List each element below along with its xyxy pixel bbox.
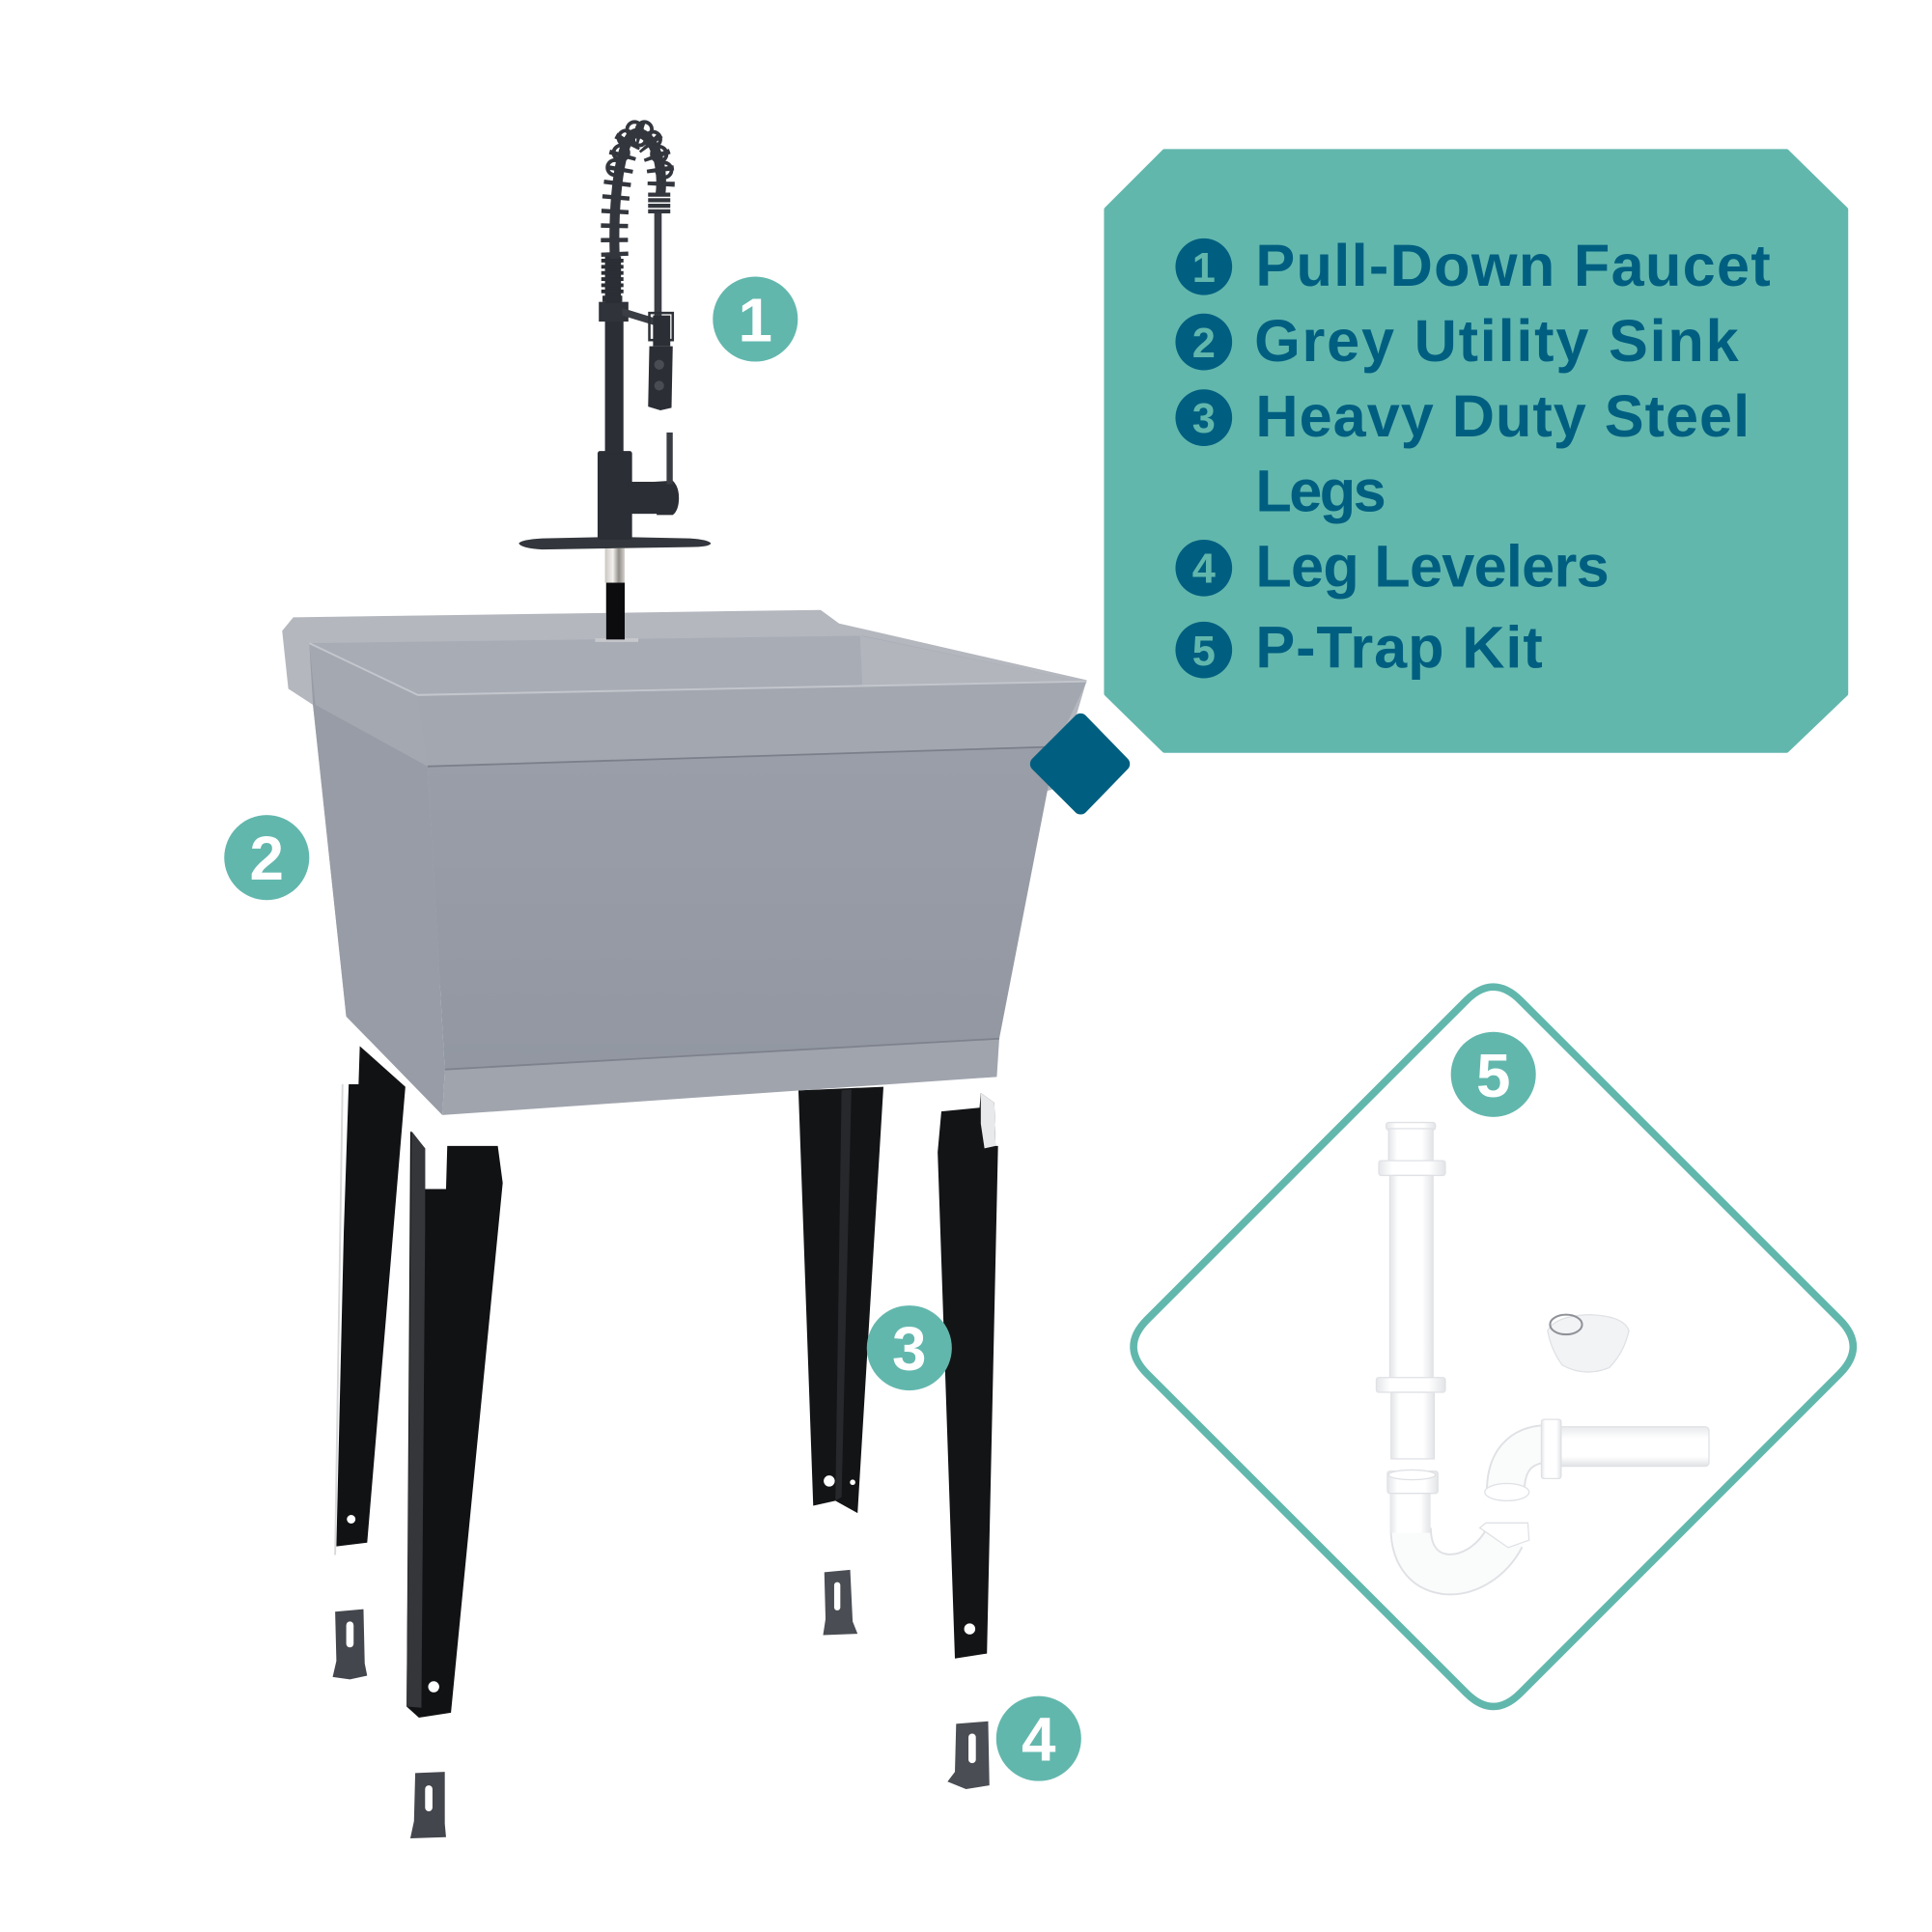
list item 3: Heavy Duty Steel [1255,383,1750,449]
sink front panel [428,746,1056,1070]
sink rear deck [282,610,1087,1017]
p-trap kit parts [1376,1123,1709,1575]
sink [282,610,1087,1115]
faucet stem [599,256,655,454]
faucet spray head [648,313,673,410]
faucet [518,122,711,641]
number badge 3: 3 [892,1314,927,1384]
faucet deck plate [518,537,711,549]
panel background [1106,152,1846,750]
number badge 4: 4 [1022,1705,1056,1775]
front right leg [938,1093,998,1659]
upper tailpiece [1376,1123,1445,1459]
sink bottom band [442,1039,999,1115]
list item 2: 2 [1192,321,1216,367]
leg leveler front left [410,1772,446,1838]
list item 5: 5 [1192,629,1216,675]
panel: p-trap kit frame [1134,987,1853,1706]
list item 3 [1175,383,1750,524]
trap arm [1485,1419,1709,1500]
number badge 2 [224,815,309,900]
list item 1: Pull-Down Faucet [1255,233,1771,298]
number badge 4 [996,1696,1081,1781]
sink stopper [1548,1315,1629,1372]
list item 4: Leg Levelers [1255,533,1610,599]
list item 3: 3 [1192,396,1216,442]
list item 2: Grey Utility Sink [1254,308,1740,374]
faucet spring coil [607,122,672,259]
sink basin interior [309,635,1085,695]
sink front rim [418,682,1087,767]
leg leveler front right [947,1722,990,1789]
back left leg [335,1046,406,1554]
callout pointer diamond [1038,721,1123,807]
number badge 5: 5 [1476,1041,1510,1110]
faucet handle [598,433,679,540]
list item 5: P-Trap Kit [1255,615,1543,681]
number badge 1 [713,276,798,362]
faucet pull-down hose [655,213,661,317]
leg leveler back left [333,1610,367,1679]
j-bend [1387,1470,1529,1575]
number badge 5 [1451,1032,1536,1117]
sink left rim corner [309,643,428,767]
faucet tail piece [606,583,625,639]
sink left side [309,643,445,1115]
number badge 1: 1 [739,285,772,354]
front left leg [406,1132,503,1718]
list item 3: Legs [1255,459,1386,524]
sink drain hole [595,638,638,642]
back right leg [798,1087,883,1513]
panel: parts list [1106,152,1846,750]
list item 4: 4 [1192,546,1216,593]
number badge 3 [867,1305,952,1390]
number badge 2: 2 [250,824,284,893]
leg leveler back right [823,1570,857,1635]
faucet threaded shank [605,548,625,641]
list item 1: 1 [1192,245,1216,292]
